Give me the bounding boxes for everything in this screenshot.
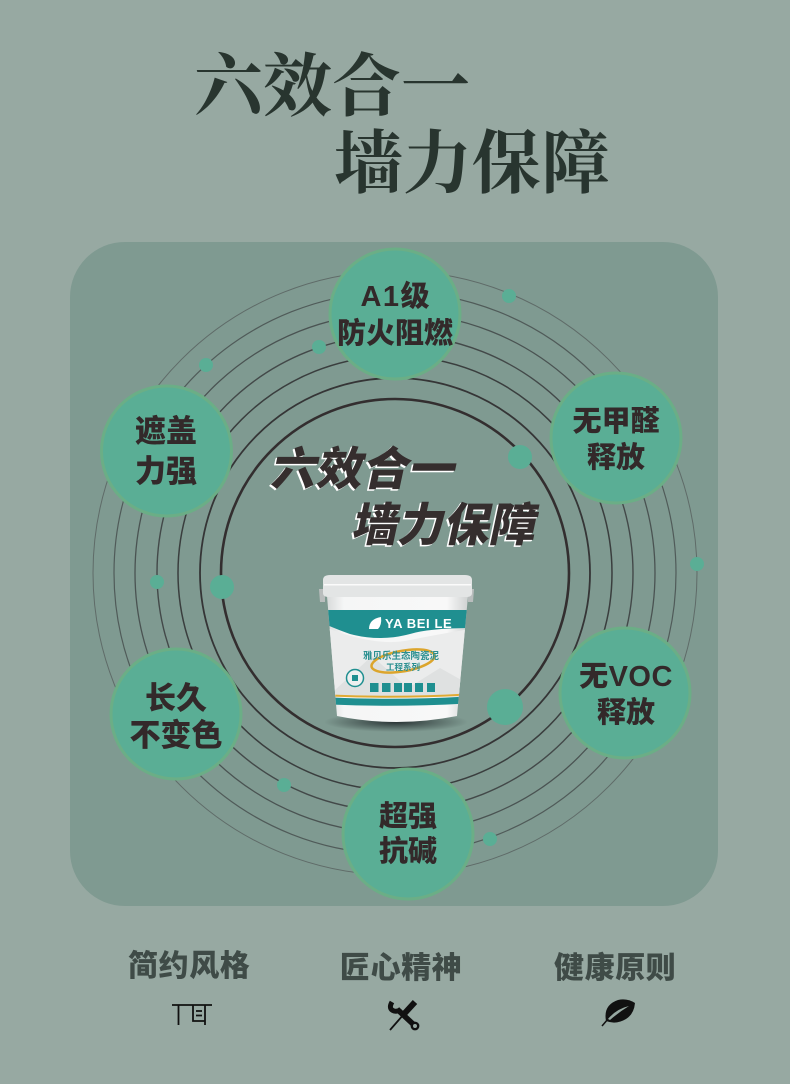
- feature: A1 fire: 防火阻燃: [337, 318, 453, 350]
- centre slogan line 2: 墙力保障: [348, 499, 543, 551]
- feature: colour lasting: 长久: [145, 681, 207, 716]
- footer label: simple style: 简约风格: [128, 950, 250, 983]
- feature: no formaldehyde: 释放: [587, 442, 645, 474]
- feature: colour lasting: 不变色: [130, 718, 222, 753]
- feature: coverage: 力强: [135, 454, 197, 489]
- footer label: health: 健康原则: [554, 952, 676, 985]
- title line 1: 六效合一: [194, 49, 470, 125]
- feature: alkali resistance: 超强: [379, 801, 437, 833]
- feature: A1 fire: A1级: [360, 281, 430, 313]
- icon: paint bucket: YA BEI LE: [385, 616, 452, 631]
- feature: coverage: 遮盖: [135, 414, 197, 449]
- centre slogan line 1: 六效合一: [267, 443, 462, 495]
- icon: paint bucket: 雅贝乐生态陶瓷泥: [363, 648, 440, 662]
- feature: no VOC: 无VOC: [579, 661, 673, 693]
- footer label: craftsmanship: 匠心精神: [340, 952, 462, 985]
- feature: no VOC: 释放: [597, 697, 655, 729]
- feature: no formaldehyde: [572, 406, 660, 474]
- icon: paint bucket: [319, 575, 474, 731]
- feature: colour lasting: [130, 681, 222, 753]
- feature: no VOC: [579, 661, 673, 729]
- panel: central rounded background: [70, 242, 718, 906]
- feature: A1 fire: [337, 280, 453, 350]
- feature: coverage: [135, 414, 197, 489]
- title line 2: 墙力保障: [334, 126, 610, 202]
- feature: alkali resistance: 抗碱: [379, 836, 437, 868]
- icon: paint bucket: 工程系列: [386, 661, 421, 673]
- feature: no formaldehyde: 无甲醛: [572, 406, 660, 438]
- feature: alkali resistance: [379, 801, 437, 868]
